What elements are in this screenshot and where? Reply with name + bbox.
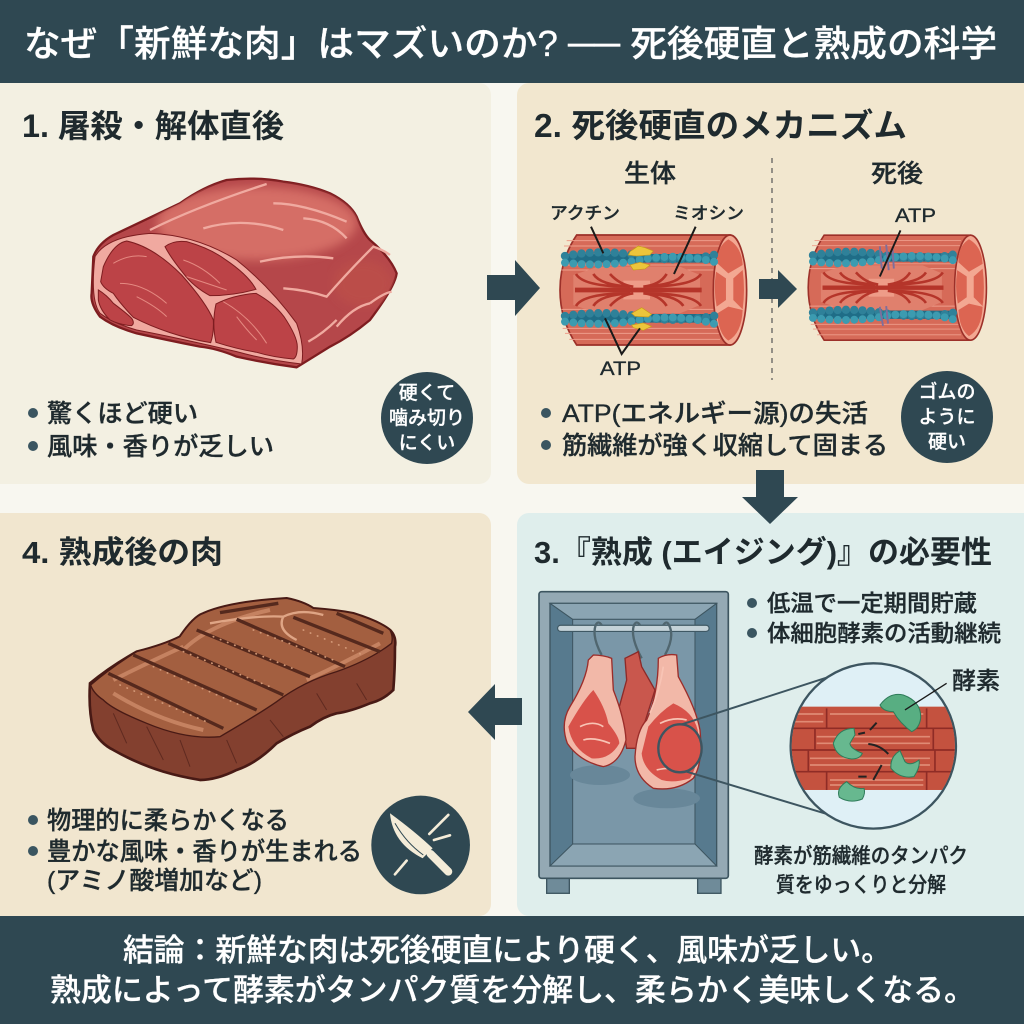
panel 2: rigor mortis mechanism: [517, 83, 1024, 484]
bullet list 2: ATP(エネルギー源)の失活: [562, 400, 868, 428]
icon: knife badge: [371, 796, 470, 894]
bullet list 4: 豊かな風味・香りが生まれる: [47, 838, 362, 866]
bullet list 1: 風味・香りが乏しい: [47, 433, 274, 461]
bullet list 4: (アミノ酸増加など): [47, 867, 262, 895]
column label: living: 生体: [624, 160, 676, 188]
caption: enzyme action: 酵素が筋繊維のタンパク: [754, 845, 968, 868]
heading 2: 2. 死後硬直のメカニズム: [534, 107, 907, 144]
panel 1: immediately after slaughter: [0, 83, 491, 484]
header band: [0, 0, 1024, 83]
conclusion line 1: 結論：新鮮な肉は死後硬直により硬く、風味が乏しい。: [123, 933, 892, 968]
arrow: living to post mortem: [759, 270, 797, 308]
heading 4: 4. 熟成後の肉: [22, 535, 223, 570]
diagram: post-mortem muscle fibre: [808, 230, 986, 340]
arrow: step 1 to step 2: [487, 260, 540, 316]
title: なぜ「新鮮な肉」はマズいのか? ── 死後硬直と熟成の科学: [24, 23, 997, 64]
caption: enzyme action: 質をゆっくりと分解: [776, 874, 946, 897]
arrow: step 2 to step 3: [742, 470, 798, 524]
badge: rubbery hard: ように: [918, 407, 976, 428]
diagram: living muscle fibre: [560, 227, 747, 354]
conclusion band: [0, 916, 1024, 1024]
illustration: aging cabinet with hanging meat: [539, 592, 960, 893]
label: actin: アクチン: [550, 204, 620, 223]
badge: hard to chew: 硬くて: [399, 383, 455, 404]
bullet list 1: [28, 400, 274, 461]
illustration: grilled steak: [90, 598, 395, 780]
bullet list 1: 驚くほど硬い: [47, 400, 198, 428]
bullet list 3: [747, 590, 1001, 646]
heading 3: 3.『熟成 (エイジング)』の必要性: [534, 535, 992, 570]
column label: post mortem: 死後: [871, 160, 923, 188]
label: ATP (post mortem): ATP: [895, 206, 936, 227]
bullet list 3: 体細胞酵素の活動継続: [767, 620, 1001, 646]
panel 4: after aging: [0, 513, 491, 916]
bullet list 2: 筋繊維が強く収縮して固まる: [562, 432, 888, 460]
badge: rubbery hard: [901, 371, 993, 463]
badge: hard to chew: にくい: [399, 433, 455, 454]
illustration: raw meat block: [91, 179, 397, 367]
bullet list 3: 低温で一定期間貯蔵: [767, 590, 977, 616]
badge: rubbery hard: ゴムの: [918, 380, 976, 403]
label: ATP (living): ATP: [600, 359, 641, 380]
bullet list 2: [541, 400, 888, 460]
caption: enzyme action: [754, 845, 968, 897]
badge: hard to chew: [381, 372, 473, 464]
panel 3: aging: [517, 513, 1024, 916]
heading 1: 1. 屠殺・解体直後: [22, 108, 284, 144]
bullet list 4: [28, 807, 362, 895]
bullet list 4: 物理的に柔らかくなる: [47, 807, 289, 835]
conclusion line 2: 熟成によって酵素がタンパク質を分解し、柔らかく美味しくなる。: [50, 973, 975, 1008]
badge: rubbery hard: 硬い: [928, 432, 966, 453]
label: enzyme: 酵素: [952, 668, 1000, 695]
arrow: step 3 to step 4: [468, 684, 522, 740]
label: myosin: ミオシン: [673, 204, 744, 223]
badge: hard to chew: 噛み切り: [389, 407, 465, 429]
